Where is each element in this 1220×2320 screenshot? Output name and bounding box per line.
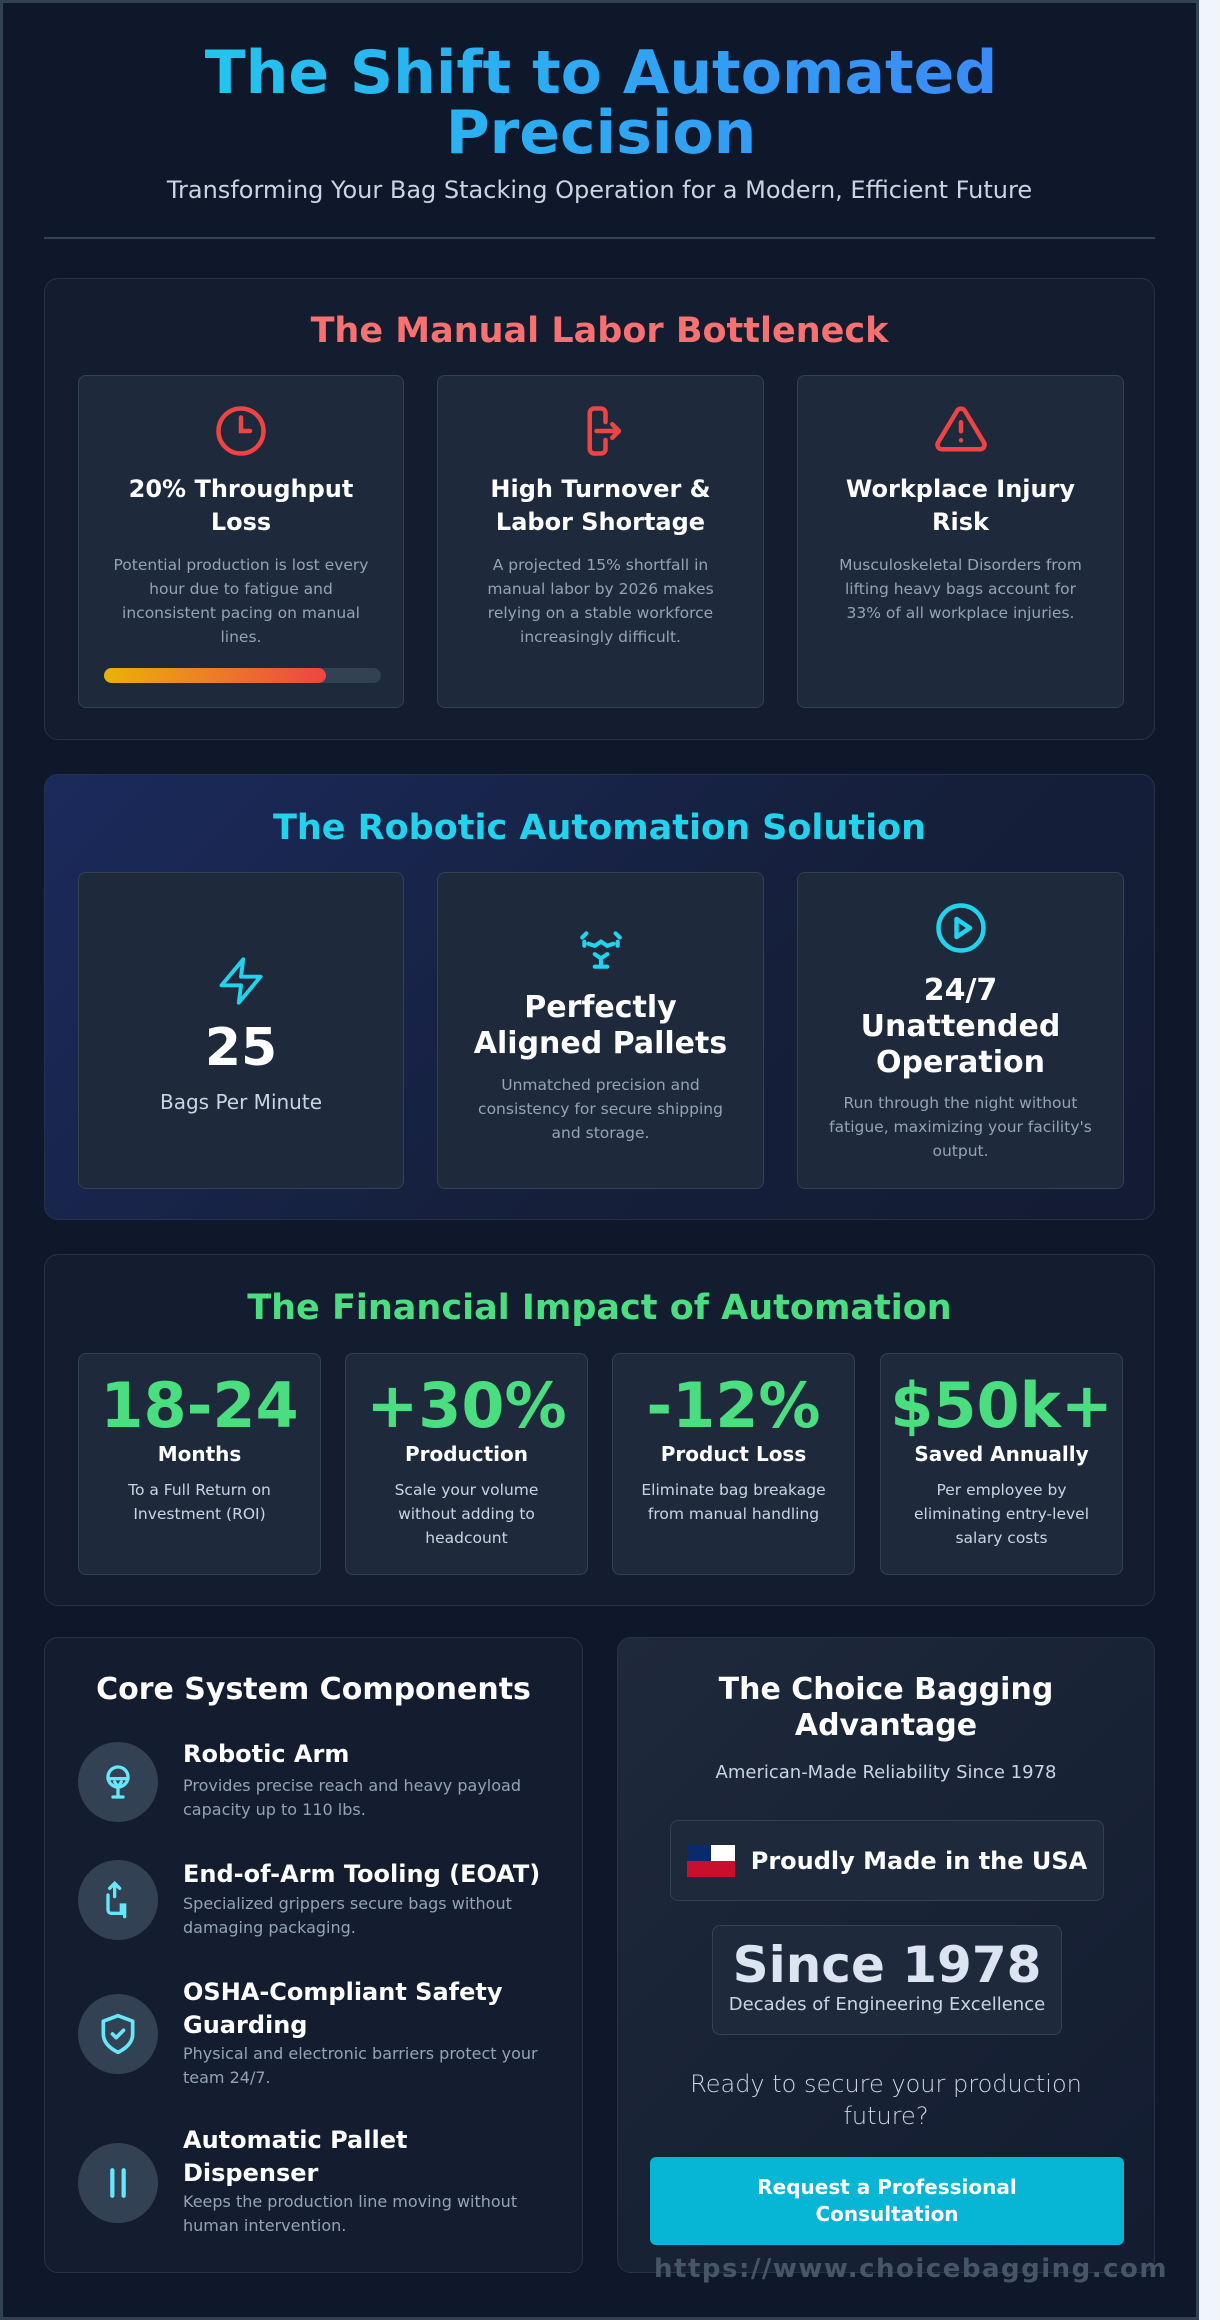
subheading: American-Made Reliability Since 1978 [716,1762,1056,1783]
panel: manual labor bottleneck [44,278,1155,740]
stat: product loss: -12% [646,1369,821,1442]
card: throughput loss: Potential production is lost every hour due to fatigue and inconsistent pacing on manual lines. [114,556,368,646]
card: injury: Musculoskeletal Disorders from lifting heavy bags account for 33% of all workplace injuries. [839,556,1082,622]
icon: pallet bars [78,2143,158,2223]
item: pallet dispenser: Keeps the production line moving without human intervention. [183,2192,517,2235]
stat: production: Scale your volume without adding to headcount [395,1481,538,1547]
title: Precision [446,98,756,168]
card: 24/7: 24/7 [924,973,997,1008]
heading: advantage: The Choice Bagging [719,1672,1053,1707]
panel: choice bagging advantage [617,1637,1155,2273]
stat: product loss: Eliminate bag breakage from manual handling [641,1481,826,1523]
card: aligned pallets: Unmatched precision and consistency for secure shipping and storage. [478,1076,723,1142]
badge: made in USA: Proudly Made in the USA [751,1846,1087,1874]
subtitle: Transforming Your Bag Stacking Operation for a Modern, Efficient Future [167,176,1032,204]
item: robotic arm: Robotic Arm [183,1740,349,1768]
heading: financial: The Financial Impact of Automation [247,1288,952,1328]
title [203,43,999,163]
heading: bottleneck: The Manual Labor Bottleneck [311,311,888,351]
heading: advantage [718,1672,1053,1743]
item: EOAT: Specialized grippers secure bags without damaging packaging. [183,1894,512,1937]
item: pallet dispenser: Dispenser [183,2159,318,2187]
card: injury: Risk [932,508,989,536]
badge: made in USA [670,1820,1104,1901]
item: safety guarding: Physical and electronic barriers protect your team 24/7. [183,2044,538,2087]
call to action text: future? [843,2102,929,2130]
button: consultation [650,2157,1124,2245]
card: injury [797,375,1124,708]
card: 24/7: Run through the night without fatigue, maximizing your facility's output. [829,1094,1092,1160]
card: throughput loss: Loss [211,508,271,536]
icon: warning [935,406,987,452]
card: injury: Workplace Injury [846,475,1075,503]
card: throughput loss [78,375,404,708]
call to action text [690,2070,1082,2130]
icon: flag [687,1845,735,1877]
call to action text: Ready to secure your production [690,2070,1082,2098]
badge: since 1978 [712,1925,1062,2035]
card: throughput loss: 20% Throughput [129,475,353,503]
icon: clock [216,406,266,456]
stat: ROI: To a Full Return on Investment (ROI) [128,1481,271,1523]
card: turnover: A projected 15% shortfall in manual labor by 2026 makes relying on a stable workforce increasingly difficult. [487,556,714,646]
card: aligned pallets [437,872,764,1189]
icon: alignment [580,931,622,969]
icon: arm [78,1742,158,1822]
icon: gripper [78,1860,158,1940]
icon: exit [588,406,622,456]
icon: play circle [936,903,986,953]
button: consultation: Consultation [815,2202,959,2226]
stat: ROI: 18-24 [100,1369,299,1442]
stat: product loss: Product Loss [661,1442,806,1466]
panel: core components [44,1637,583,2273]
stat: savings: $50k+ [890,1369,1113,1442]
stat: production: +30% [366,1369,567,1442]
stat: production: Production [405,1442,528,1466]
stat: savings: Saved Annually [914,1442,1089,1466]
progress bar [104,668,381,683]
panel: financial impact [44,1254,1155,1606]
item: pallet dispenser [78,2126,517,2235]
icon: lightning [219,957,263,1005]
card: 25 bpm: 25 [205,1018,277,1078]
card: 24/7 [797,872,1124,1189]
card: 25 bpm [78,872,404,1189]
item: safety guarding [78,1978,538,2087]
card: aligned pallets: Aligned Pallets [474,1026,727,1061]
card: 24/7: Operation [876,1045,1045,1080]
stat: ROI: Months [158,1442,241,1466]
heading: advantage: Advantage [795,1708,977,1743]
stat: savings [880,1353,1123,1575]
stat: savings: Per employee by eliminating entry-level salary costs [914,1481,1089,1547]
panel: robotic solution [44,774,1155,1220]
heading: solution: The Robotic Automation Solution [273,808,926,848]
card: turnover: High Turnover & [490,475,711,503]
item: EOAT [78,1860,540,1940]
item: robotic arm: Provides precise reach and heavy payload capacity up to 110 lbs. [183,1776,521,1819]
button: consultation: Request a Professional [757,2175,1017,2199]
stat: production [345,1353,588,1575]
card: turnover: Labor Shortage [496,508,705,536]
card: turnover [437,375,764,708]
item: safety guarding: Guarding [183,2011,308,2039]
card: 25 bpm: Bags Per Minute [160,1090,322,1114]
card: aligned pallets: Perfectly [524,990,677,1025]
heading: components: Core System Components [96,1672,531,1707]
item: pallet dispenser: Automatic Pallet [183,2126,407,2154]
stat: ROI [78,1353,321,1575]
item: EOAT: End-of-Arm Tooling (EOAT) [183,1860,540,1888]
badge: since 1978: Decades of Engineering Excellence [729,1994,1045,2015]
url footer: https://www.choicebagging.com [654,2254,1168,2284]
icon: shield [78,1994,158,2074]
title: The Shift to Automated [205,38,997,108]
item: safety guarding: OSHA-Compliant Safety [183,1978,502,2006]
badge: since 1978: Since 1978 [733,1936,1041,1994]
item: robotic arm [78,1740,521,1822]
stat: product loss [612,1353,855,1575]
card: 24/7: Unattended [861,1009,1060,1044]
